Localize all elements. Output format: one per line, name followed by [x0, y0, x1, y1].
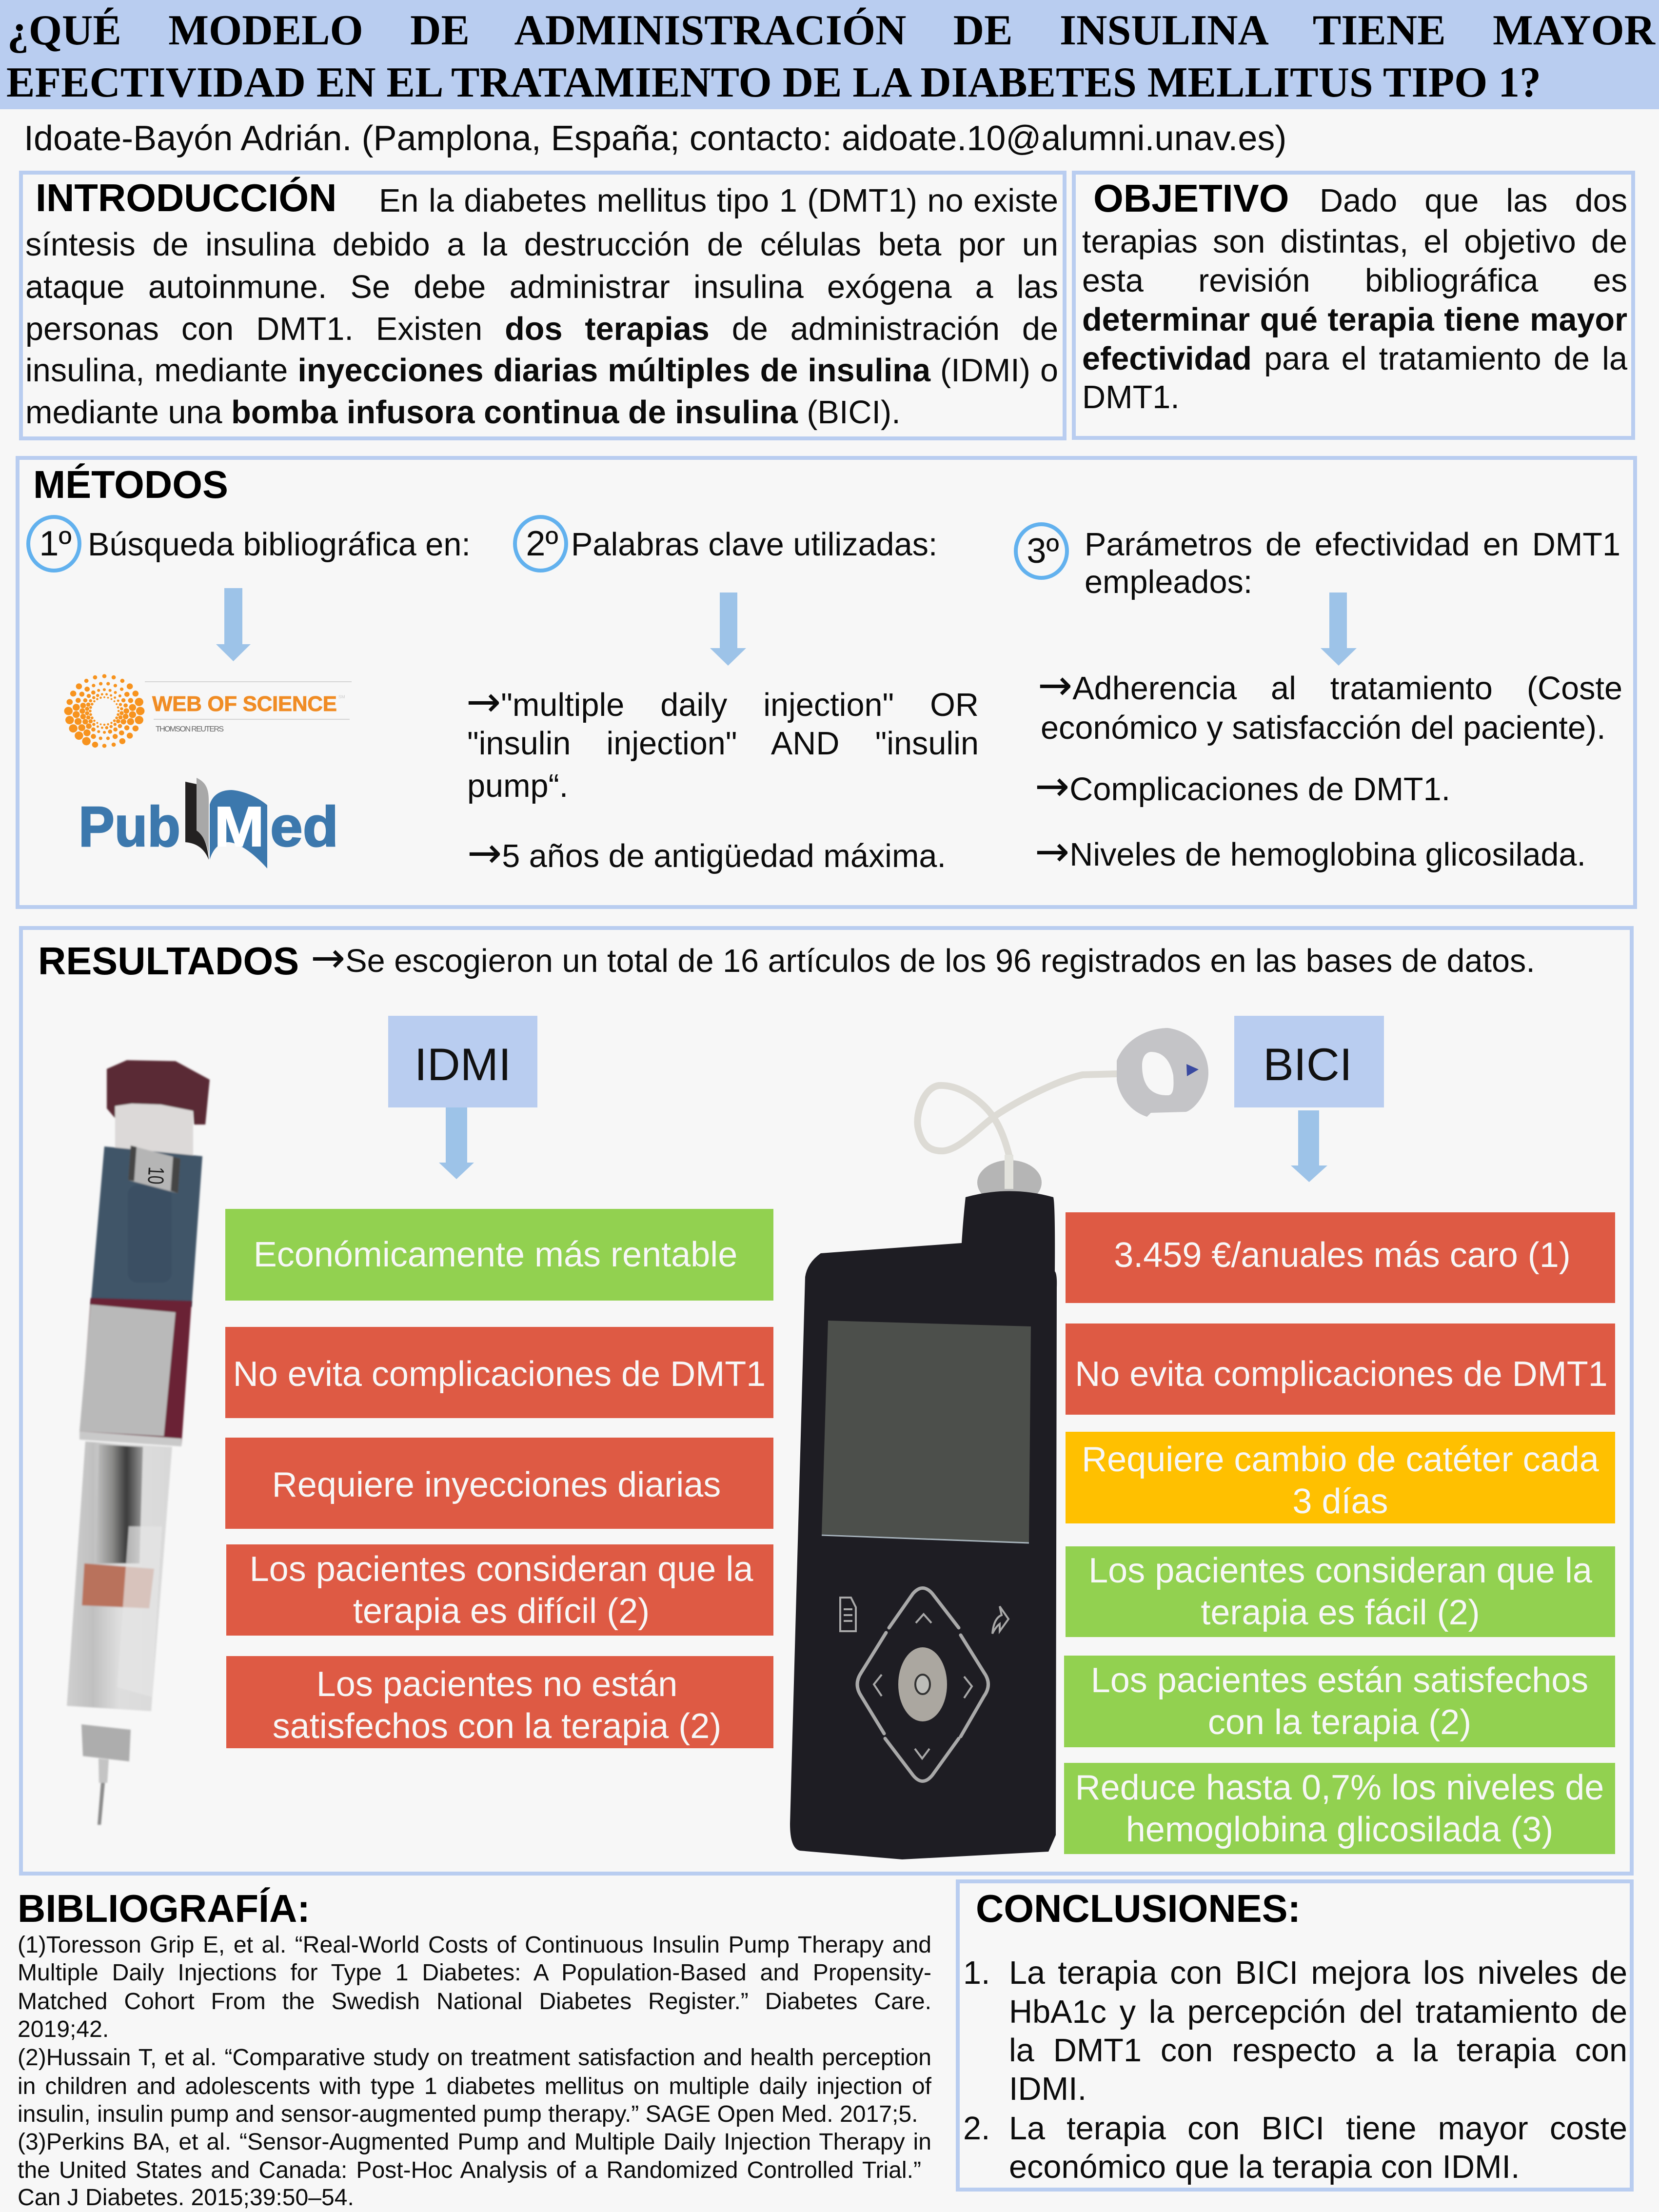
text block: introducción: síntesis de insulina debido a la destrucción de células beta por un: [25, 227, 1058, 263]
reference 3: Can J Diabetes. 2015;39:50–54.: [18, 2184, 354, 2211]
step 3 label: empleados:: [1085, 564, 1252, 600]
reference 3: [18, 2128, 931, 2212]
text block: keywords: pump“.: [467, 768, 568, 804]
step 1 number circle: [26, 515, 81, 573]
heading: introducción: INTRODUCCIÓN: [36, 176, 336, 219]
BICI: satisfaction: Los pacientes están satisfechos: [1091, 1661, 1588, 1700]
text block: effectiveness parameters: →Niveles de hemoglobina glicosilada.: [1035, 828, 1586, 876]
conclusion 2: La terapia con BICI tiene mayor coste: [1009, 2111, 1627, 2147]
arrow: BICI: [1291, 1110, 1327, 1182]
heading: resultados: RESULTADOS: [38, 939, 299, 983]
icon: PubMed logo: ed: [270, 795, 338, 858]
icon: insulin pen: 10: [143, 1166, 168, 1185]
panel: bibliografía: [18, 1882, 931, 2212]
IDMI: satisfaction: satisfechos con la terapia (2): [273, 1707, 721, 1746]
text block: objetivo: determinar qué terapia tiene mayor: [1082, 302, 1627, 338]
step 2 number circle: [513, 515, 568, 573]
reference 1: (1)Toresson Grip E, et al. “Real-World Costs of Continuous Insulin Pump Therapy and: [18, 1932, 931, 1958]
title line 2: EFECTIVIDAD EN EL TRATAMIENTO DE LA DIABETES MELLITUS TIPO 1?: [6, 59, 1541, 106]
step 3 number circle: 3º: [1027, 532, 1059, 571]
BICI: ease: terapia es fácil (2): [1201, 1593, 1480, 1632]
heading: conclusiones: CONCLUSIONES:: [976, 1887, 1301, 1930]
text block: objetivo: Dado que las dos: [1320, 183, 1627, 219]
step 3 number circle: [1014, 522, 1069, 580]
BICI: catheter: [1066, 1432, 1615, 1523]
step 1 label: Búsqueda bibliográfica en:: [88, 527, 471, 563]
icon: Web of Science logo: WEB OF SCIENCE: [152, 692, 337, 716]
IDMI: cost: Económicamente más rentable: [254, 1235, 737, 1274]
icon: PubMed logo: [79, 778, 338, 869]
text block: introducción: [25, 183, 1058, 431]
pump body: [790, 1191, 1057, 1859]
infusion set ring: [1117, 1028, 1208, 1117]
icon: Web of Science logo: [64, 674, 352, 748]
author line: Idoate-Bayón Adrián. (Pamplona, España; contacto: aidoate.10@alumni.unav.es): [24, 119, 1286, 158]
IDMI: cost: [225, 1209, 773, 1301]
text block: objetivo: efectividad para el tratamiento de la: [1082, 341, 1627, 377]
text block: keywords: →"multiple daily injection" OR: [466, 678, 979, 726]
label: IDMI: [388, 1016, 537, 1107]
text block: objetivo: terapias son distintas, el objetivo de: [1082, 224, 1627, 260]
text block: effectiveness parameters: [1035, 661, 1622, 876]
text block: introducción: ataque autoinmune. Se debe administrar insulina exógena a las: [25, 269, 1058, 305]
reference 3: the United States and Canada: Post-Hoc Analysis of a Randomized Controlled Trial.”: [18, 2157, 921, 2183]
BICI: cost: [1066, 1212, 1615, 1303]
conclusion 1: La terapia con BICI mejora los niveles de: [1009, 1955, 1627, 1991]
title line 1: ¿QUÉ MODELO DE ADMINISTRACIÓN DE INSULINA TIENE MAYOR: [7, 6, 1655, 54]
text: results summary: →Se escogieron un total de 16 artículos de los 96 registrados en las bases de datos.: [311, 934, 1535, 982]
connector dome: [977, 1160, 1042, 1205]
panel: introducción: [19, 171, 1066, 440]
pump screen: [822, 1321, 1031, 1542]
BICI: complications: [1066, 1323, 1615, 1415]
IDMI: injections: Requiere inyecciones diarias: [272, 1465, 721, 1504]
icon: insulin pump: [785, 1024, 1214, 1868]
BICI: satisfaction: con la terapia (2): [1208, 1703, 1471, 1742]
reference 3: (3)Perkins BA, et al. “Sensor-Augmented Pump and Multiple Daily Injection Therapy in: [18, 2129, 931, 2155]
text block: keywords: "insulin injection" AND "insulin: [467, 726, 979, 762]
conclusion 1: la DMT1 con respecto a la terapia con: [1009, 2033, 1627, 2069]
BICI: ease: Los pacientes consideran que la: [1088, 1551, 1592, 1590]
d-pad: [857, 1588, 988, 1781]
title band: [0, 0, 1659, 109]
BICI: catheter: 3 días: [1292, 1482, 1388, 1521]
panel: métodos: [16, 456, 1637, 909]
conclusion 2: [963, 2109, 1627, 2187]
BICI: HbA1c: Reduce hasta 0,7% los niveles de: [1075, 1768, 1604, 1807]
BICI: cost: 3.459 €/anuales más caro (1): [1114, 1236, 1571, 1275]
BICI: complications: No evita complicaciones de DMT1: [1075, 1355, 1608, 1394]
icon: PubMed logo: Pub: [79, 795, 180, 858]
label: BICI: BICI: [1263, 1039, 1352, 1090]
reference 1: Matched Cohort From the Swedish National Diabetes Register.” Diabetes Care.: [18, 1988, 931, 2014]
BICI: catheter: Requiere cambio de catéter cada: [1082, 1440, 1599, 1479]
BICI: HbA1c: hemoglobina glicosilada (3): [1126, 1810, 1553, 1849]
reference 1: 2019;42.: [18, 2016, 109, 2042]
IDMI: difficulty: [226, 1544, 773, 1636]
arrow: IDMI: [439, 1107, 474, 1179]
reference 1: Multiple Daily Injections for Type 1 Diabetes: A Population-Based and Propensity-: [18, 1959, 931, 1986]
icon: insulin pen: [63, 1053, 219, 1834]
text block: keywords: →5 años de antigüedad máxima.: [467, 829, 946, 877]
conclusion 2: económico que la terapia con IDMI.: [1009, 2149, 1520, 2185]
IDMI: satisfaction: [226, 1656, 773, 1748]
text block: effectiveness parameters: →Adherencia al tratamiento (Coste: [1038, 661, 1622, 710]
label: BICI: [1234, 1016, 1384, 1107]
heading: bibliografía: BIBLIOGRAFÍA:: [18, 1887, 310, 1930]
heading: métodos: MÉTODOS: [33, 463, 228, 506]
label: IDMI: IDMI: [415, 1039, 511, 1090]
text block: keywords: [466, 678, 979, 877]
text block: introducción: personas con DMT1. Existen dos terapias de administración de: [25, 311, 1058, 347]
reference 1: [18, 1931, 931, 2043]
arrow: step 2: [710, 592, 746, 666]
reference 2: (2)Hussain T, et al. “Comparative study on treatment satisfaction and health perception: [18, 2044, 931, 2071]
text block: introducción: mediante una bomba infusora continua de insulina (BICI).: [25, 395, 901, 431]
text block: objetivo: [1082, 183, 1628, 415]
icon: Web of Science logo: SM: [338, 694, 345, 699]
panel: resultados: [19, 926, 1634, 1876]
IDMI: difficulty: terapia es difícil (2): [353, 1592, 650, 1631]
infusion tube: [917, 1074, 1118, 1161]
step 2 label: Palabras clave utilizadas:: [571, 527, 937, 563]
IDMI: complications: No evita complicaciones de DMT1: [233, 1355, 766, 1394]
text block: effectiveness parameters: económico y satisfacción del paciente).: [1041, 710, 1606, 746]
arrow: step 3: [1321, 592, 1357, 666]
arrow: step 1: [216, 588, 251, 661]
icon: PubMed logo: M: [214, 795, 264, 858]
panel: conclusiones: [956, 1879, 1634, 2192]
text block: effectiveness parameters: →Complicaciones de DMT1.: [1035, 762, 1450, 810]
heading: objetivo: OBJETIVO: [1093, 177, 1289, 220]
IDMI: complications: [225, 1327, 773, 1418]
panel: objetivo: [1072, 171, 1635, 440]
conclusion 1: IDMI.: [1009, 2071, 1086, 2107]
IDMI: injections: [225, 1438, 773, 1529]
conclusion 2: 2.: [963, 2111, 990, 2147]
conclusion 1: 1.: [963, 1955, 990, 1991]
icon: Web of Science logo: THOMSON REUTERS: [156, 725, 224, 733]
text block: introducción: En la diabetes mellitus tipo 1 (DMT1) no existe: [379, 183, 1058, 219]
IDMI: difficulty: Los pacientes consideran que la: [250, 1550, 753, 1589]
text block: objetivo: esta revisión bibliográfica es: [1082, 263, 1627, 299]
step 2 number circle: 2º: [526, 524, 558, 563]
BICI: satisfaction: [1064, 1656, 1615, 1747]
conclusion 1: [963, 1954, 1627, 2109]
step 1 number circle: 1º: [39, 524, 72, 563]
conclusion 1: HbA1c y la percepción del tratamiento de: [1009, 1994, 1627, 2030]
step 3 label: [1085, 527, 1620, 600]
reference 2: insulin, insulin pump and sensor-augmented pump therapy.” SAGE Open Med. 2017;5.: [18, 2101, 918, 2127]
reference 2: [18, 2043, 931, 2128]
text block: objetivo: DMT1.: [1082, 379, 1180, 415]
text block: introducción: insulina, mediante inyecciones diarias múltiples de insulina (IDMI) o: [25, 353, 1058, 389]
IDMI: satisfaction: Los pacientes no están: [316, 1665, 677, 1704]
BICI: HbA1c: [1064, 1763, 1615, 1854]
step 3 label: Parámetros de efectividad en DMT1: [1085, 527, 1620, 563]
BICI: ease: [1066, 1546, 1615, 1637]
reference 2: in children and adolescents with type 1 diabetes mellitus on multiple daily injection of: [18, 2073, 931, 2099]
